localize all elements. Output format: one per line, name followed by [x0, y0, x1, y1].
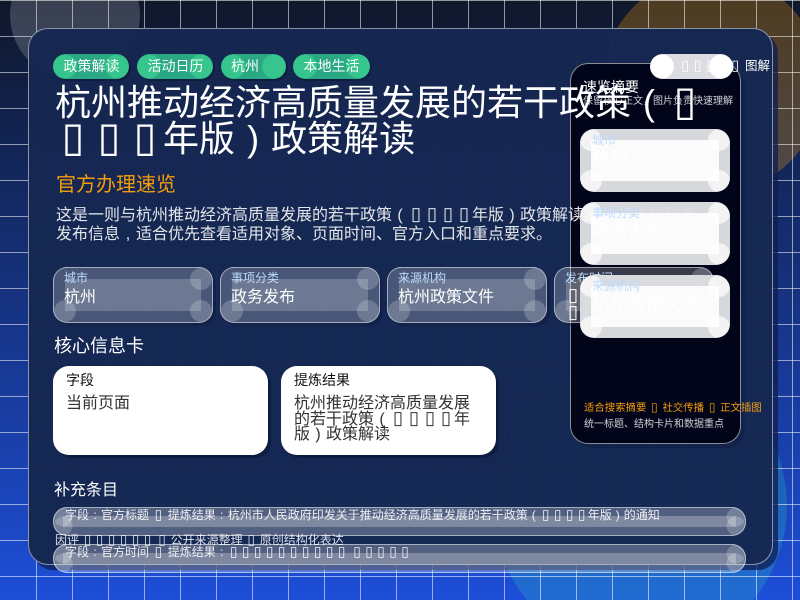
- core card: field: 当前页面: [66, 395, 130, 412]
- meta card: date: ▯: [648, 285, 658, 306]
- row: official time: ▯: [155, 544, 162, 560]
- meta card: date: ▯: [616, 285, 626, 306]
- tag: local life: [293, 54, 370, 79]
- meta card: date: ▯: [584, 302, 594, 323]
- row: official time: ▯: [266, 544, 274, 560]
- meta card: date: ▯: [568, 302, 578, 323]
- side card: source: 来源机构: [592, 279, 640, 293]
- title: 杭州推动经济高质量发展的若干政策: [55, 82, 631, 123]
- meta card: date: [554, 267, 714, 323]
- row: official time: :: [220, 545, 223, 559]
- row: official time: :: [93, 545, 97, 559]
- footnote: ▯: [144, 532, 151, 548]
- title: ▯: [134, 113, 156, 161]
- intro paragraph: ▯: [411, 204, 421, 225]
- core card: field: 字段: [66, 372, 94, 388]
- footnote: ▯: [84, 532, 91, 548]
- side card: city: [580, 129, 730, 192]
- side footer tags: ▯: [651, 400, 658, 414]
- meta card: date: ▯: [600, 285, 610, 306]
- row: official time: ▯: [326, 544, 334, 560]
- side card: city: 城市: [592, 133, 616, 147]
- tag: calendar: 活动日历: [148, 58, 204, 74]
- core card: result: ): [315, 426, 321, 443]
- heading: core info: 核心信息卡: [54, 336, 144, 356]
- row: official time: ▯: [338, 544, 346, 560]
- row: official title: [53, 507, 746, 536]
- badge text: ▯: [719, 58, 727, 74]
- badge text: ▯: [731, 58, 739, 74]
- badge text: [681, 58, 770, 74]
- row: official time: 字段 官方时间 提炼结果: [65, 545, 216, 559]
- meta card: date: 发布时间: [565, 271, 613, 285]
- side description: 保留核心正文，图片负责快速理解: [583, 96, 733, 107]
- side footer tags: 适合搜索摘要 社交传播 正文插图: [584, 403, 762, 414]
- side card: category: [580, 202, 730, 265]
- side card: category: 政务发布: [592, 221, 664, 241]
- subtitle: 官方办理速览: [56, 174, 176, 196]
- row: official time: ▯: [278, 544, 286, 560]
- core card: result: 版 政策解读: [294, 426, 390, 443]
- footnote: ▯: [96, 532, 103, 548]
- intro paragraph: ,: [126, 226, 130, 243]
- title: (: [643, 82, 655, 123]
- footnote: ▯: [158, 532, 166, 548]
- intro paragraph: [56, 204, 696, 243]
- footnote: ▯: [247, 532, 255, 548]
- row: official title: ▯: [566, 507, 574, 523]
- side heading: 速览摘要: [583, 79, 639, 95]
- meta card: city: 城市: [64, 271, 88, 285]
- title: ▯: [674, 77, 696, 125]
- core card: result: ▯: [409, 408, 419, 428]
- intro paragraph: ▯: [427, 204, 437, 225]
- side footer tags: ▯: [709, 400, 715, 414]
- title: [55, 77, 696, 161]
- title: ▯: [98, 113, 120, 161]
- row: official time: ▯: [242, 544, 250, 560]
- row: official time: ▯: [389, 544, 397, 560]
- footnote: ▯: [120, 532, 127, 548]
- intro paragraph: ▯: [443, 204, 453, 225]
- meta card: source: 杭州政策文件: [398, 289, 494, 306]
- top-right white badge: [650, 54, 733, 79]
- meta card: category: [220, 267, 380, 323]
- meta card: city: 杭州: [64, 289, 96, 306]
- meta card: date: ▯: [568, 285, 578, 306]
- title: 年版 政策解读: [163, 118, 415, 159]
- footnote: ▯: [132, 532, 139, 548]
- meta card: date: ▯: [680, 285, 690, 306]
- row: official title: (: [532, 508, 536, 522]
- row: official title: :: [93, 508, 97, 522]
- meta card: city: [53, 267, 213, 323]
- row: official time: ▯: [254, 544, 262, 560]
- core card: field: [53, 366, 268, 455]
- footnote: ▯: [108, 532, 115, 548]
- intro paragraph: 发布信息 适合优先查看适用对象、页面时间、官方入口和重点要求。: [56, 226, 552, 243]
- row: official title: 字段 官方标题 提炼结果 杭州市人民政府印发关于推动经济高质量发展的若干政策 年版 的通知: [65, 508, 660, 522]
- tag: local life: 本地生活: [304, 58, 360, 74]
- badge text: ▯: [694, 58, 702, 74]
- row: official time: ▯: [365, 544, 373, 560]
- row: official title: ▯: [554, 507, 562, 523]
- intro paragraph: ): [509, 207, 515, 224]
- heading: supplementary: 补充条目: [54, 482, 118, 499]
- side footer note: 统一标题、结构卡片和数据重点: [584, 419, 724, 430]
- row: official title: ▯: [578, 507, 586, 523]
- core card: result: 杭州推动经济高质量发展: [294, 395, 470, 412]
- tag: calendar: [137, 54, 213, 79]
- row: official time: ▯: [353, 544, 361, 560]
- meta card: source: 来源机构: [398, 271, 446, 285]
- meta card: date: ▯: [632, 285, 642, 306]
- row: official time: ▯: [401, 544, 409, 560]
- side card: source: [580, 275, 730, 338]
- side card: category: 事项分类: [592, 206, 640, 220]
- row: official title: :: [220, 508, 223, 522]
- core card: result: ▯: [393, 408, 403, 428]
- row: official title: ▯: [155, 507, 162, 523]
- meta card: date: ▯: [664, 285, 674, 306]
- footnote: 因评 公开来源整理 原创结构化表达: [55, 533, 344, 547]
- row: official time: [53, 544, 746, 573]
- intro paragraph: ▯: [459, 204, 469, 225]
- row: official time: ▯: [314, 544, 322, 560]
- core card: result: 的若干政策 年: [294, 410, 470, 428]
- side card: city: 杭州: [592, 148, 628, 168]
- intro paragraph: 这是一则与杭州推动经济高质量发展的若干政策 年版 政策解读相关的杭州政务: [56, 207, 696, 224]
- row: official time: ▯: [302, 544, 310, 560]
- intro paragraph: (: [397, 207, 403, 224]
- tag: policy reading: 政策解读: [64, 58, 120, 74]
- side card: source: 杭州政策文件: [592, 294, 700, 314]
- row: official time: ▯: [230, 544, 238, 560]
- meta card: source: [387, 267, 547, 323]
- row: official time: ▯: [377, 544, 385, 560]
- tag: policy reading: [53, 54, 129, 79]
- row: official title: ): [616, 508, 620, 522]
- row: official time: ▯: [290, 544, 298, 560]
- row: official title: ▯: [542, 507, 550, 523]
- core card: result: (: [379, 410, 385, 428]
- tag: hangzhou: [221, 54, 286, 79]
- badge text: ▯: [681, 58, 689, 74]
- meta card: category: 事项分类: [231, 271, 279, 285]
- panel: side summary: [570, 63, 741, 444]
- badge text: ▯: [706, 58, 714, 74]
- meta card: date: ▯: [584, 285, 594, 306]
- core card: result: [281, 366, 496, 455]
- core card: result: ▯: [441, 408, 451, 428]
- title: ): [247, 118, 259, 159]
- meta card: category: 政务发布: [231, 289, 295, 306]
- title: ▯: [62, 113, 84, 161]
- core card: result: 提炼结果: [294, 372, 350, 388]
- badge text: 图解: [745, 59, 770, 73]
- core card: result: ▯: [425, 408, 435, 428]
- tag: hangzhou: 杭州: [231, 58, 259, 74]
